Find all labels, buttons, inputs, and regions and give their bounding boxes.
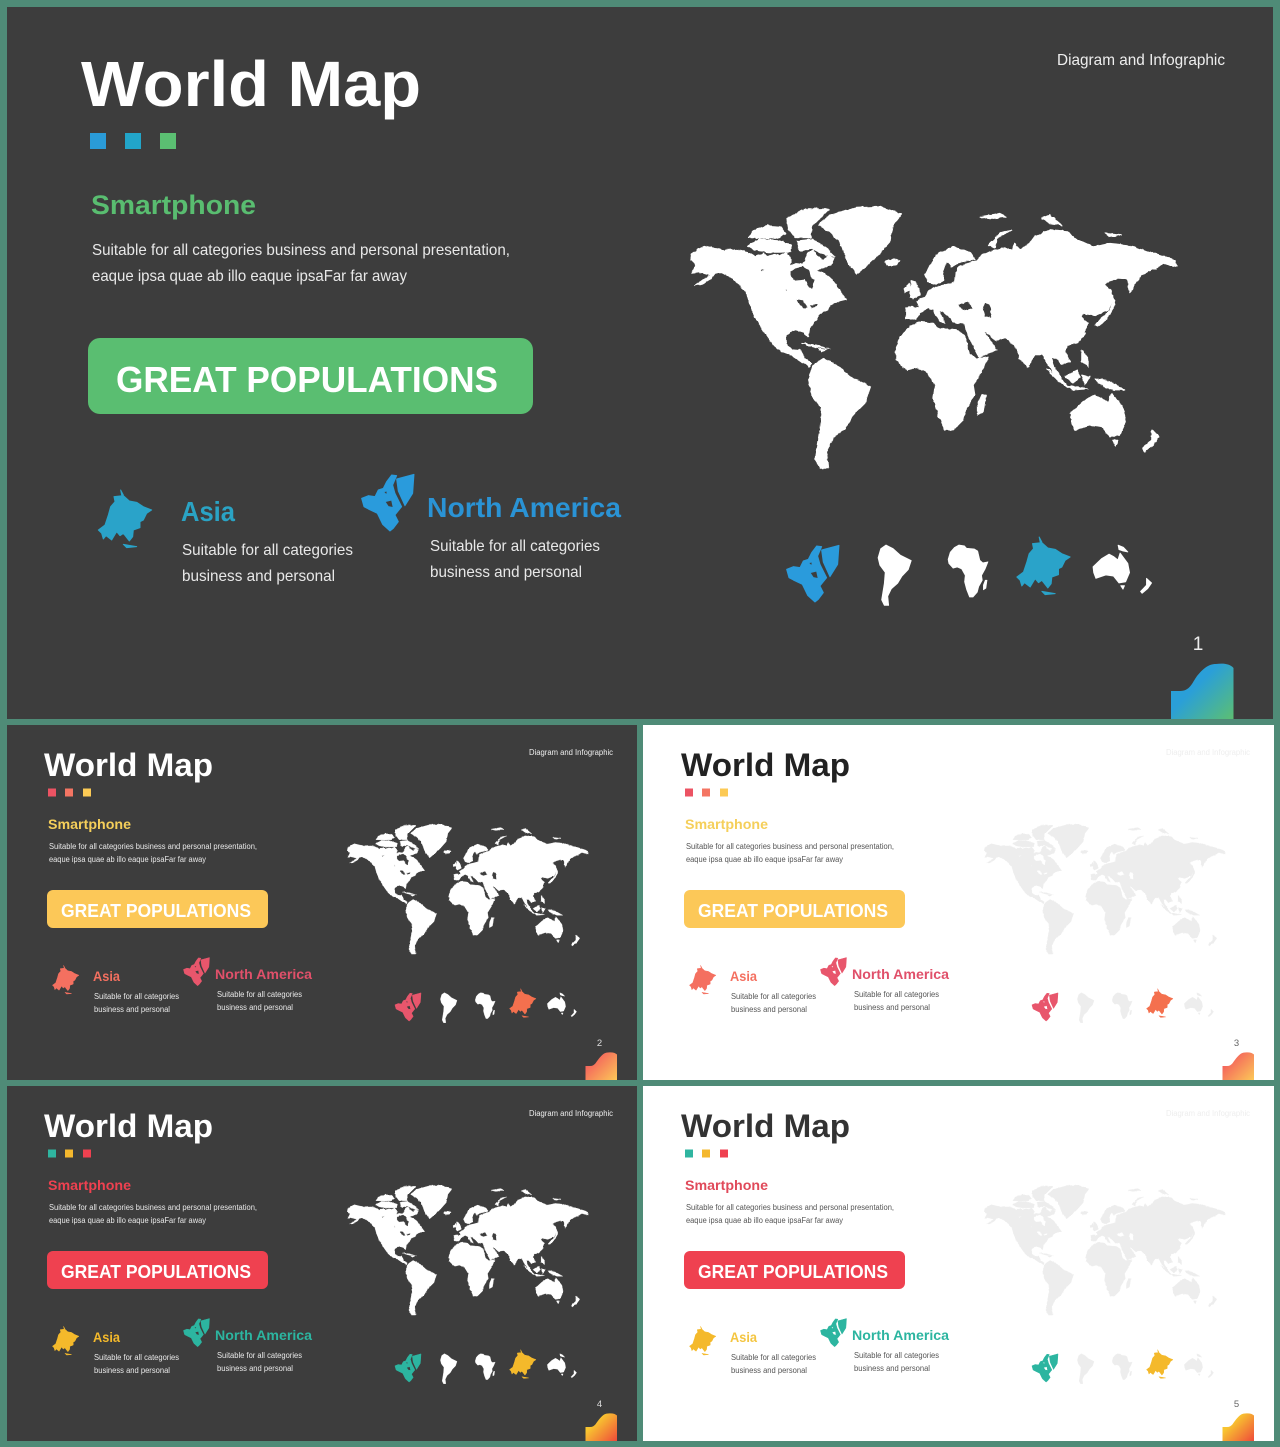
corner shape	[586, 1052, 617, 1080]
description text: eaque ipsa quae ab illo eaque ipsaFar far away	[92, 268, 407, 285]
page number: 2	[597, 1038, 602, 1049]
button: great populations: GREAT POPULATIONS	[61, 1262, 251, 1282]
North America label block	[852, 1327, 949, 1373]
accent squares	[685, 788, 728, 796]
button: great populations: GREAT POPULATIONS	[61, 901, 251, 921]
North America label block: business and personal	[217, 1003, 293, 1012]
description text: eaque ipsa quae ab illo eaque ipsaFar far away	[49, 855, 206, 864]
title: World Map	[81, 48, 421, 120]
Asia label block: Suitable for all categories	[731, 992, 816, 1001]
button: great populations	[684, 890, 905, 928]
North America label block: Suitable for all categories	[854, 1351, 939, 1360]
Asia label block	[730, 1329, 816, 1375]
button: great populations	[684, 1251, 905, 1289]
heading: Smartphone: Smartphone	[48, 817, 132, 832]
continent icons and thumbnails	[689, 1319, 1214, 1384]
accent squares	[48, 788, 91, 796]
heading: Smartphone: Smartphone	[48, 1178, 132, 1193]
heading: Smartphone: Smartphone	[91, 190, 256, 220]
North America label block	[215, 966, 312, 1012]
accent squares	[685, 1150, 728, 1158]
Asia label block: Asia	[93, 1329, 120, 1345]
North America label block: Suitable for all categories	[217, 1351, 302, 1360]
panel: slide 2 dark warm	[7, 725, 637, 1080]
description text: Suitable for all categories business and personal presentation,	[49, 1203, 257, 1212]
description text: Suitable for all categories business and personal presentation,	[686, 842, 894, 851]
Asia label block: Asia	[730, 968, 757, 984]
Asia label block: Suitable for all categories	[94, 1353, 179, 1362]
North America label block	[215, 1327, 312, 1373]
Asia label block: Asia	[181, 496, 235, 527]
North America label block	[852, 966, 949, 1012]
accent squares	[48, 1150, 91, 1158]
panel: slide 1 large dark	[7, 7, 1273, 719]
description text: Suitable for all categories business and personal presentation,	[92, 242, 510, 259]
continent icons and thumbnails	[52, 1319, 577, 1384]
description text: Suitable for all categories business and personal presentation,	[49, 842, 257, 851]
title: World Map	[681, 747, 850, 783]
North America label block: Suitable for all categories	[430, 538, 600, 555]
panel: slide 3 light warm	[643, 725, 1274, 1080]
description text	[49, 842, 257, 864]
Asia label block: business and personal	[94, 1366, 170, 1375]
continent icons and thumbnails	[52, 958, 577, 1023]
North America label block: business and personal	[854, 1364, 930, 1373]
tagline: Diagram and Infographic	[1166, 748, 1250, 757]
Asia label block	[181, 496, 353, 585]
North America label block	[427, 492, 621, 581]
Asia label block: Suitable for all categories	[731, 1353, 816, 1362]
world map	[347, 1185, 588, 1315]
North America label block: Suitable for all categories	[854, 990, 939, 999]
button: great populations: GREAT POPULATIONS	[698, 1262, 888, 1282]
description text: eaque ipsa quae ab illo eaque ipsaFar far away	[686, 855, 843, 864]
corner shape	[586, 1413, 617, 1441]
North America label block: North America	[215, 1327, 312, 1343]
Asia label block: business and personal	[94, 1005, 170, 1014]
button: great populations	[88, 338, 533, 414]
heading: Smartphone: Smartphone	[685, 1178, 769, 1193]
Asia label block	[730, 968, 816, 1014]
panel: slide 5 light multicolor	[643, 1086, 1274, 1441]
heading: Smartphone: Smartphone	[685, 817, 769, 832]
North America label block: North America	[852, 966, 949, 982]
Asia label block: Suitable for all categories	[94, 992, 179, 1001]
North America label block: North America	[852, 1327, 949, 1343]
North America label block: North America	[215, 966, 312, 982]
button: great populations: GREAT POPULATIONS	[698, 901, 888, 921]
icon: Asia silhouette	[98, 490, 152, 548]
tagline: Diagram and Infographic	[1057, 52, 1225, 69]
page number: 3	[1234, 1038, 1239, 1049]
North America label block: Suitable for all categories	[217, 990, 302, 999]
world map	[984, 1185, 1225, 1315]
accent squares	[90, 133, 176, 149]
Asia label block: Suitable for all categories	[182, 542, 353, 559]
button: great populations: GREAT POPULATIONS	[116, 359, 498, 400]
description text: eaque ipsa quae ab illo eaque ipsaFar far away	[686, 1216, 843, 1225]
icon: North America silhouette	[362, 474, 414, 531]
corner shape	[1171, 664, 1234, 719]
North America label block: North America	[427, 492, 621, 523]
world map	[691, 207, 1177, 468]
Asia label block: business and personal	[731, 1366, 807, 1375]
title: World Map	[44, 1108, 213, 1144]
description text: eaque ipsa quae ab illo eaque ipsaFar far away	[49, 1216, 206, 1225]
description text	[92, 242, 510, 285]
description text	[686, 842, 894, 864]
North America label block: business and personal	[430, 564, 582, 581]
page number: 1	[1193, 634, 1203, 655]
Asia label block: business and personal	[731, 1005, 807, 1014]
corner shape	[1222, 1052, 1254, 1080]
Asia label block: Asia	[93, 968, 120, 984]
Asia label block	[93, 968, 179, 1014]
title: World Map	[681, 1108, 850, 1144]
corner shape	[1222, 1413, 1254, 1441]
North America label block: business and personal	[217, 1364, 293, 1373]
panel: slide 4 dark multicolor	[7, 1086, 637, 1441]
Asia label block: business and personal	[182, 568, 335, 585]
tagline: Diagram and Infographic	[529, 748, 613, 757]
Asia label block	[93, 1329, 179, 1375]
Asia label block: Asia	[730, 1329, 757, 1345]
description text	[686, 1203, 894, 1225]
continent thumbnails	[787, 537, 1152, 605]
description text: Suitable for all categories business and personal presentation,	[686, 1203, 894, 1212]
world map	[347, 824, 588, 954]
title: World Map	[44, 747, 213, 783]
tagline: Diagram and Infographic	[1166, 1109, 1250, 1118]
page number: 5	[1234, 1399, 1239, 1410]
button: great populations	[47, 890, 268, 928]
tagline: Diagram and Infographic	[529, 1109, 613, 1118]
continent icons and thumbnails	[689, 958, 1214, 1023]
page number: 4	[597, 1399, 602, 1410]
button: great populations	[47, 1251, 268, 1289]
world map	[984, 824, 1225, 954]
description text	[49, 1203, 257, 1225]
North America label block: business and personal	[854, 1003, 930, 1012]
